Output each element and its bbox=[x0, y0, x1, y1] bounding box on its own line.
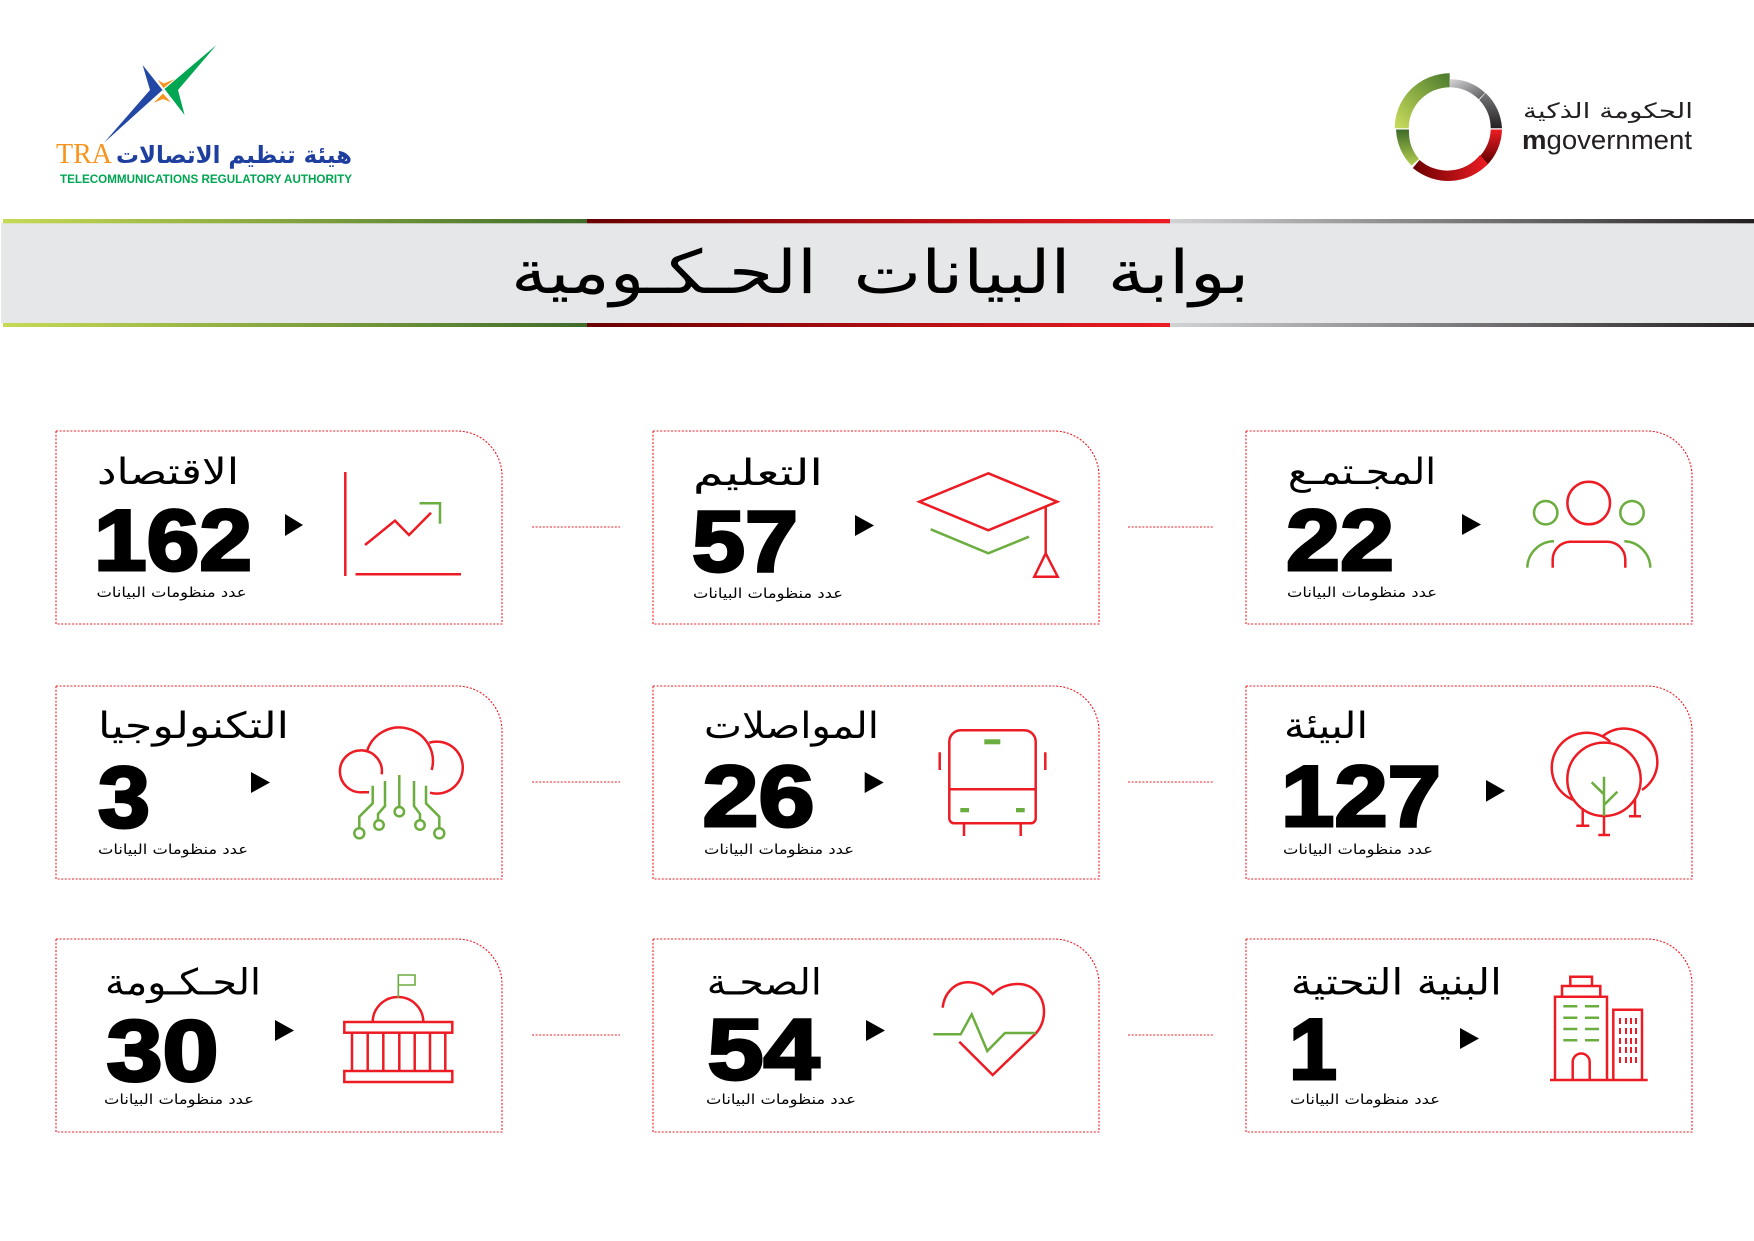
icon: bus bbox=[940, 730, 1045, 836]
panel: health bbox=[653, 939, 1099, 1132]
icon: people bbox=[1527, 482, 1650, 568]
heading: الصحـة bbox=[707, 962, 822, 1003]
panel: community bbox=[1246, 431, 1692, 624]
arrow bbox=[275, 1020, 294, 1041]
arrow bbox=[285, 514, 303, 536]
caption: عدد منظومات البيانات bbox=[693, 586, 843, 602]
caption: عدد منظومات البيانات bbox=[1283, 842, 1433, 858]
caption: عدد منظومات البيانات bbox=[1287, 585, 1437, 601]
panel: environment bbox=[1246, 686, 1692, 879]
TRA latin lettering: TRA bbox=[56, 138, 112, 170]
panel: economy bbox=[56, 431, 502, 624]
number: 162 bbox=[94, 493, 252, 589]
icon: trees bbox=[1552, 729, 1657, 835]
panel: education bbox=[653, 431, 1099, 624]
arrow bbox=[865, 772, 884, 793]
mGovernment arabic name: الحكومة الذكية bbox=[1523, 99, 1693, 123]
logo: TRA bbox=[56, 45, 352, 186]
number: 127 bbox=[1281, 749, 1441, 845]
arrow bbox=[866, 1020, 885, 1041]
title: البيانات bbox=[854, 238, 1070, 308]
number: 30 bbox=[106, 1004, 218, 1100]
heading: المجـتمـع bbox=[1288, 452, 1436, 493]
icon: government building bbox=[344, 975, 452, 1082]
arrow bbox=[1462, 514, 1481, 535]
number: 22 bbox=[1286, 493, 1394, 589]
number: 3 bbox=[98, 750, 150, 846]
icon: cloud circuit bbox=[340, 727, 463, 838]
heading: التكنولوجيا bbox=[98, 706, 289, 747]
heading: التعليم bbox=[693, 453, 823, 494]
heading: المواصلات bbox=[704, 706, 879, 747]
icon: segmented ring bbox=[1395, 73, 1502, 181]
arrow bbox=[1460, 1028, 1479, 1049]
caption: عدد منظومات البيانات bbox=[1290, 1092, 1440, 1108]
TRA arabic name: هيئة تنظيم الاتصالات bbox=[116, 141, 352, 169]
panel: infrastructure bbox=[1246, 939, 1692, 1132]
panel: government bbox=[56, 939, 502, 1132]
arrow bbox=[251, 772, 270, 793]
title: بوابة bbox=[1108, 238, 1250, 308]
mGovernment latin name: mgovernment bbox=[1522, 125, 1692, 155]
logo: mGovernment bbox=[1395, 73, 1693, 181]
icon: TRA star mark bbox=[104, 45, 216, 143]
number: 57 bbox=[692, 494, 798, 590]
arrow bbox=[1486, 780, 1505, 802]
icon: chart bbox=[345, 472, 461, 576]
arrow bbox=[855, 515, 874, 536]
caption: عدد منظومات البيانات bbox=[96, 585, 246, 601]
icon: heart pulse bbox=[933, 982, 1044, 1075]
TRA english name: TELECOMMUNICATIONS REGULATORY AUTHORITY bbox=[60, 174, 352, 186]
heading: البيئة bbox=[1284, 706, 1368, 747]
icon: buildings bbox=[1550, 977, 1648, 1080]
heading: الحـكـومة bbox=[105, 962, 261, 1003]
number: 1 bbox=[1289, 1002, 1337, 1098]
title: الحـكـومية bbox=[511, 238, 817, 308]
caption: عدد منظومات البيانات bbox=[98, 842, 248, 858]
connector lines between cards bbox=[532, 527, 1214, 1035]
number: 54 bbox=[708, 1002, 820, 1098]
number: 26 bbox=[702, 749, 814, 845]
panel: technology bbox=[56, 686, 502, 879]
heading: الاقتصاد bbox=[97, 452, 239, 493]
title banner bbox=[1, 219, 1754, 327]
panel: transport bbox=[653, 686, 1099, 879]
icon: graduation cap bbox=[919, 473, 1058, 577]
caption: عدد منظومات البيانات bbox=[704, 842, 854, 858]
title bbox=[511, 238, 1250, 308]
caption: عدد منظومات البيانات bbox=[706, 1092, 856, 1108]
heading: البنية التحتية bbox=[1291, 962, 1502, 1003]
caption: عدد منظومات البيانات bbox=[104, 1092, 254, 1108]
